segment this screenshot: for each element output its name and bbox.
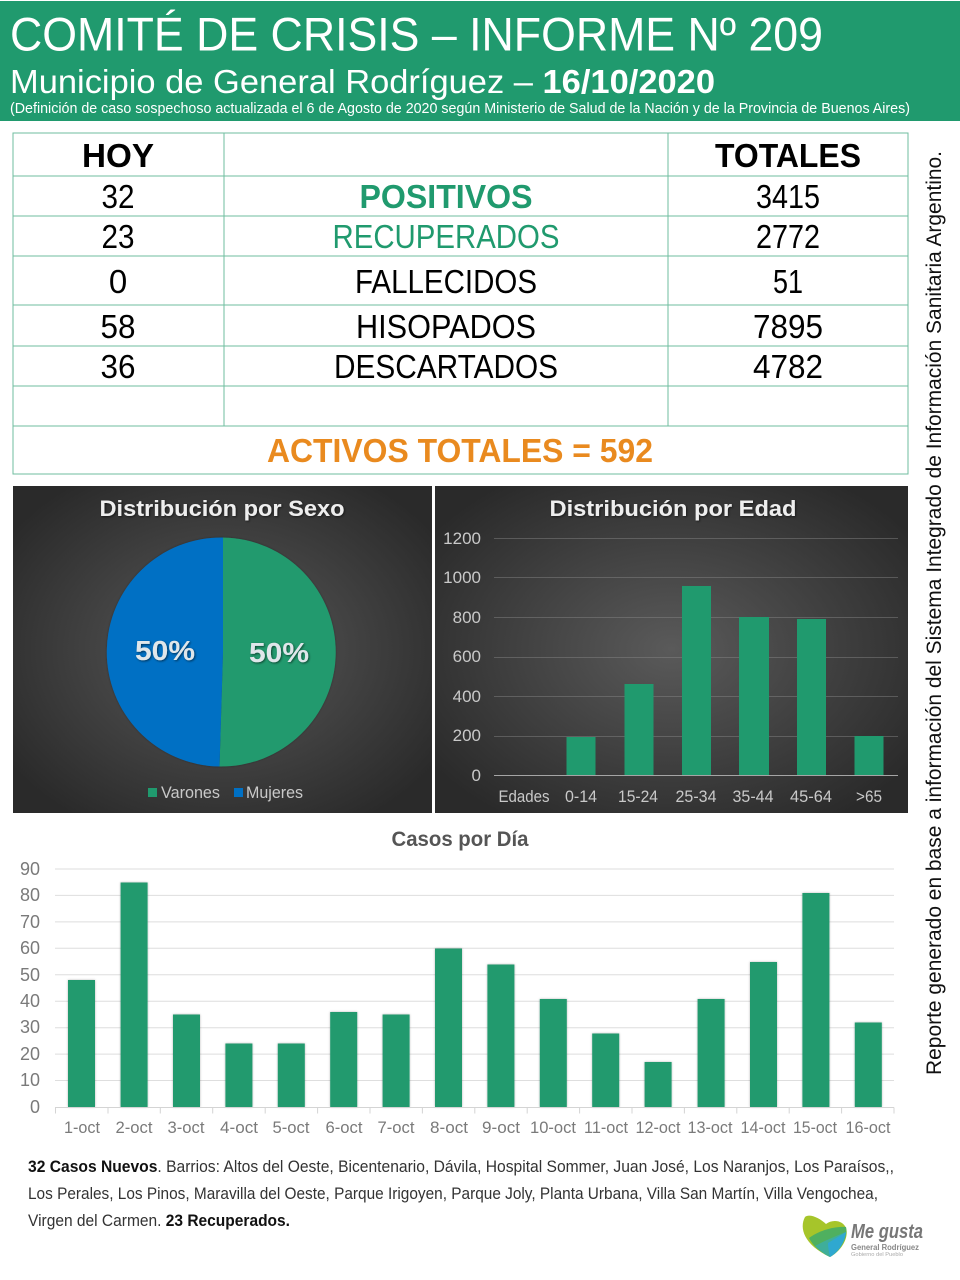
label: mujeres 50%: 50% <box>135 635 195 666</box>
row: recuperados: 2772 <box>756 218 820 255</box>
logo: me gusta general rodríguez <box>803 1216 923 1258</box>
pie legend <box>148 783 303 802</box>
row: descartados <box>100 348 823 385</box>
daily x axis labels: 6-oct <box>326 1119 363 1137</box>
daily x axis labels: 4-oct <box>220 1119 258 1137</box>
age x axis labels: 45-64 <box>790 787 832 806</box>
row: descartados: 36 <box>100 348 136 385</box>
subtitle with date: Municipio de General Rodríguez – 16/10/2020 <box>10 63 715 100</box>
panel: distribución por sexo <box>13 486 432 813</box>
daily bars <box>68 882 882 1107</box>
summary table <box>13 133 908 474</box>
daily y axis labels: 70 <box>20 912 40 932</box>
daily x axis labels <box>64 1119 891 1137</box>
daily x axis labels: 3-oct <box>168 1119 205 1137</box>
age x axis labels: 35-44 <box>732 787 774 806</box>
pie legend: Varones <box>161 783 220 802</box>
daily x axis labels: 5-oct <box>272 1119 310 1137</box>
activos totales: ACTIVOS TOTALES = 592 <box>267 432 653 469</box>
row: hisopados: 58 <box>100 308 136 345</box>
daily y axis labels: 40 <box>20 991 40 1011</box>
age x axis labels: Edades <box>498 787 550 806</box>
age y axis labels: 1000 <box>443 568 481 587</box>
pie legend: Mujeres <box>246 783 303 802</box>
footer text: Los Perales, Los Pinos, Maravilla del Oeste, Parque Irigoyen, Parque Joly, Planta Urbana, Villa San Martín, Villa Vengochea, <box>28 1185 878 1203</box>
age x axis labels <box>498 787 882 806</box>
row: fallecidos <box>109 263 803 300</box>
footer text <box>28 1158 894 1230</box>
row: fallecidos: FALLECIDOS <box>355 263 537 300</box>
age bars <box>566 586 884 776</box>
daily y axis labels: 80 <box>20 885 40 905</box>
panel: distribución por edad <box>435 486 908 813</box>
vertical source note: Reporte generado en base a información del Sistema Integrado de Información Sanitaria Argentino. <box>923 151 946 1075</box>
age x axis labels: 15-24 <box>618 787 658 806</box>
age y axis labels: 800 <box>453 608 481 627</box>
footer text: Virgen del Carmen. 23 Recuperados. <box>28 1212 290 1230</box>
daily x axis labels: 2-oct <box>116 1119 153 1137</box>
age x axis labels: >65 <box>856 787 882 806</box>
table header: hoy: HOY <box>82 137 154 174</box>
age x axis labels: 25-34 <box>676 787 716 806</box>
daily x axis labels: 7-oct <box>378 1119 415 1137</box>
age y axis labels <box>443 529 481 785</box>
age y axis labels: 0 <box>472 766 481 785</box>
row: recuperados: RECUPERADOS <box>332 218 560 255</box>
daily x axis labels: 12-oct <box>636 1119 681 1137</box>
row: hisopados <box>100 308 823 345</box>
daily x axis labels: 13-oct <box>688 1119 733 1137</box>
daily y axis labels: 0 <box>30 1097 40 1117</box>
age y axis labels: 1200 <box>443 529 481 548</box>
row: positivos: POSITIVOS <box>360 178 532 215</box>
age y axis labels: 400 <box>453 687 481 706</box>
daily y axis labels: 60 <box>20 938 40 958</box>
row: hisopados: HISOPADOS <box>356 308 536 345</box>
label: varones 50%: 50% <box>249 637 309 668</box>
daily y axis labels: 50 <box>20 965 40 985</box>
footer text: 32 Casos Nuevos. Barrios: Altos del Oeste, Bicentenario, Dávila, Hospital Sommer, Juan José, Los Naranjos, Los Paraísos,, <box>28 1158 894 1176</box>
daily x axis labels: 9-oct <box>482 1119 520 1137</box>
daily y axis labels: 20 <box>20 1044 40 1064</box>
age y axis labels: 200 <box>453 726 481 745</box>
row: positivos: 32 <box>102 178 134 215</box>
icon: heart <box>803 1216 847 1257</box>
row: recuperados: 23 <box>102 218 134 255</box>
table header: totales: TOTALES <box>715 137 861 174</box>
logo wordmark: Me gusta <box>851 1221 923 1243</box>
row: hisopados: 7895 <box>753 308 823 345</box>
row: positivos: 3415 <box>756 178 820 215</box>
chart: casos por día <box>20 828 894 1137</box>
daily y axis labels: 90 <box>20 859 40 879</box>
row: fallecidos: 0 <box>109 263 127 300</box>
daily x axis labels: 11-oct <box>584 1119 628 1137</box>
daily y axis labels: 10 <box>20 1070 40 1090</box>
logo name: General Rodríguez <box>851 1243 919 1252</box>
row: descartados: 4782 <box>753 348 823 385</box>
daily y axis labels <box>20 859 40 1117</box>
daily x axis labels: 8-oct <box>430 1119 468 1137</box>
daily x axis labels: 1-oct <box>64 1119 100 1137</box>
row: recuperados <box>102 218 820 255</box>
daily heading: Casos por Día <box>392 828 529 851</box>
row: positivos <box>102 178 820 215</box>
age y axis labels: 600 <box>453 647 481 666</box>
pie chart <box>107 537 336 767</box>
daily y axis labels: 30 <box>20 1017 40 1037</box>
title: COMITÉ DE CRISIS – INFORME Nº 209 <box>10 8 823 60</box>
daily x axis labels: 10-oct <box>530 1119 576 1137</box>
row: descartados: DESCARTADOS <box>334 348 558 385</box>
daily x axis labels: 15-oct <box>793 1119 837 1137</box>
age x axis labels: 0-14 <box>565 787 597 806</box>
daily x axis labels: 16-oct <box>846 1119 891 1137</box>
case definition note: (Definición de caso sospechoso actualizada el 6 de Agosto de 2020 según Ministerio de Salud de la Nación y de la Provincia de Buenos Aires) <box>10 100 910 117</box>
daily x axis labels: 14-oct <box>740 1119 786 1137</box>
pie heading: Distribución por Sexo <box>100 496 344 521</box>
logo tagline: Gobierno del Pueblo <box>851 1252 903 1258</box>
row: fallecidos: 51 <box>773 263 803 300</box>
age heading: Distribución por Edad <box>550 496 796 521</box>
header banner <box>0 1 960 121</box>
